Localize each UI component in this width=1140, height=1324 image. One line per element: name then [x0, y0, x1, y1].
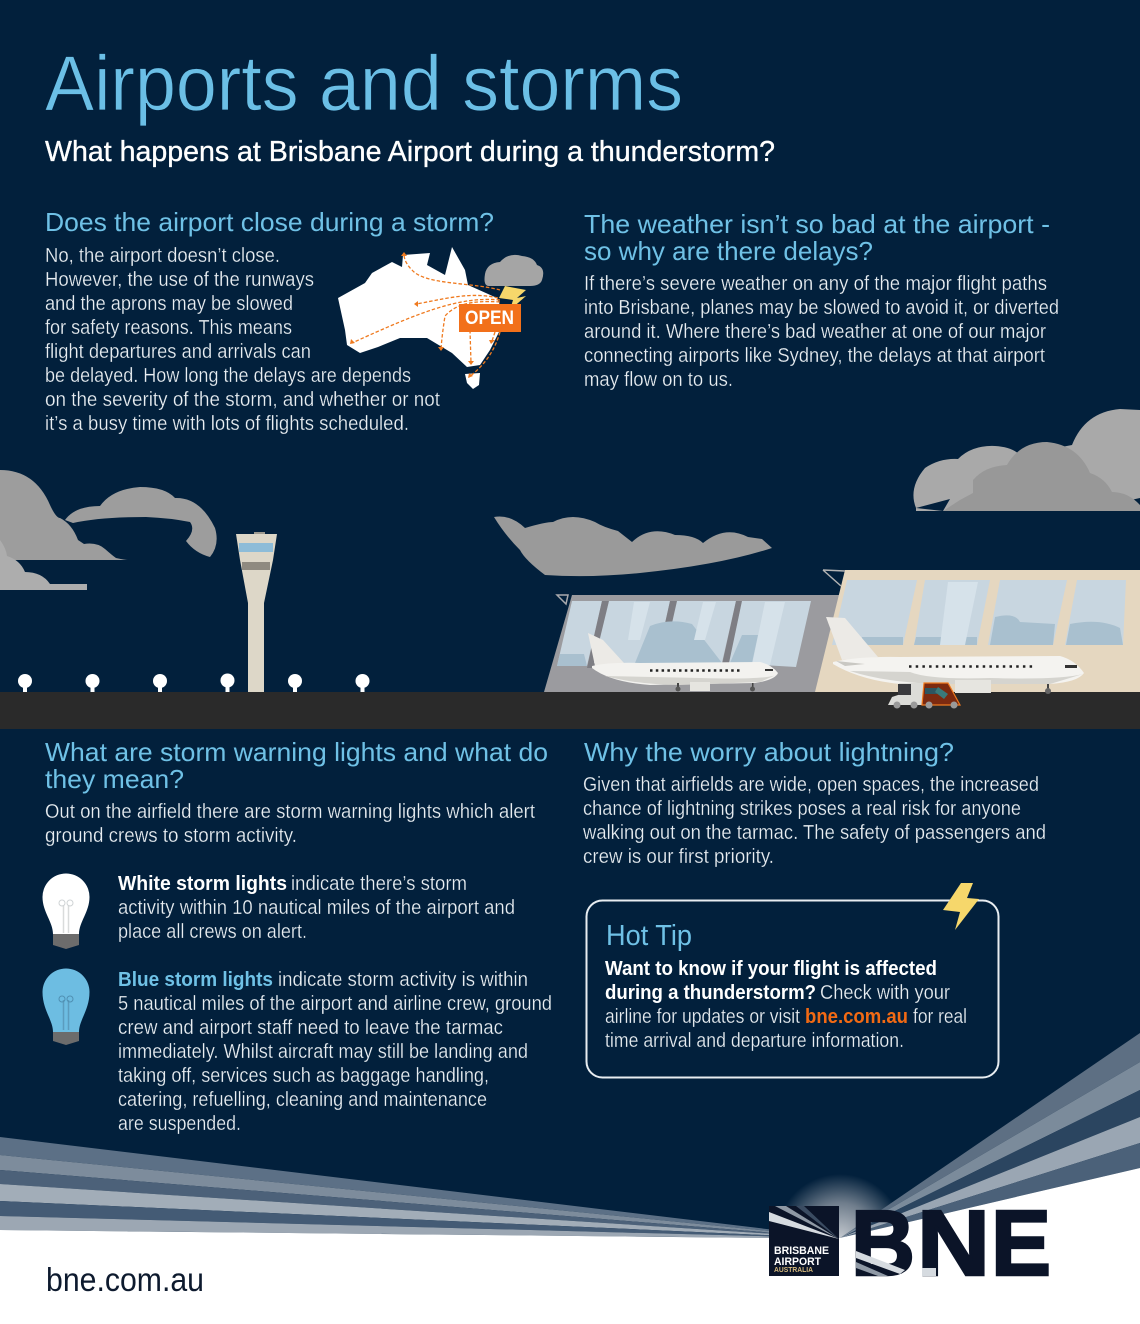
cloud: left group: [0, 470, 217, 590]
logo: Brisbane Airport: BRISBANE: [774, 1245, 829, 1257]
text block: lightning explanation: chance of lightning strikes poses a real risk for anyone: [583, 798, 1021, 820]
text block: blue storm lights: Blue storm lights: [118, 969, 273, 991]
text block: hot tip body: airline for updates or visit: [605, 1006, 800, 1028]
map of Australia with flight paths: [338, 247, 543, 389]
rays: left: [0, 1137, 775, 1238]
icon: lightning bolt on map: [499, 286, 526, 310]
window reflections: [557, 621, 758, 666]
text block: airport close answer: However, the use of the runways: [45, 269, 314, 291]
text block: hot tip body: bne.com.au: [805, 1006, 908, 1028]
text block: airport close answer: flight departures and arrivals can: [45, 341, 311, 363]
sign: open: OPEN: [465, 308, 514, 329]
logo: Brisbane Airport: [769, 1206, 839, 1276]
text block: white storm lights: White storm lights: [118, 873, 287, 895]
subtitle: What happens at Brisbane Airport during a thunderstorm?: [45, 136, 775, 168]
text block: airport close answer: for safety reasons. This means: [45, 317, 292, 339]
text block: blue storm lights: indicate storm activity is within: [278, 969, 528, 991]
panel: does the airport close: [45, 207, 543, 435]
text block: airport close answer: it’s a busy time with lots of flights scheduled.: [45, 413, 409, 435]
text block: hot tip body: [605, 958, 967, 1052]
storm warning lights on airfield: [18, 674, 370, 692]
link: bne.com.au: bne.com.au: [46, 1261, 204, 1298]
text block: blue storm lights: [118, 969, 552, 1135]
cloud: right: [913, 409, 1140, 511]
plane: far: [588, 633, 778, 692]
logo: Brisbane Airport: AUSTRALIA: [774, 1267, 813, 1274]
icon: storm cloud: [484, 255, 543, 286]
text block: lightning explanation: walking out on the tarmac. The safety of passengers and: [582, 822, 1046, 844]
text block: blue storm lights: 5 nautical miles of the airport and airline crew, ground: [118, 993, 552, 1015]
text block: delays explanation: around it. Where there’s bad weather at one of our major: [584, 321, 1046, 343]
illustration: airport scene: [0, 409, 1140, 729]
text block: white storm lights: indicate there’s storm: [291, 873, 467, 895]
text block: blue storm lights: are suspended.: [118, 1113, 241, 1135]
text block: airport close answer: on the severity of the storm, and whether or not: [45, 389, 440, 411]
text block: lightning explanation: crew is our first priority.: [583, 846, 774, 868]
white base: [0, 1168, 1140, 1324]
heading: why the worry about lightning: Why the worry about lightning?: [584, 737, 954, 767]
logo: BNE wordmark: N: [917, 1191, 990, 1295]
logo: BNE wordmark: [851, 1191, 1051, 1295]
panel: storm warning lights: [42, 737, 552, 1135]
runway: [0, 692, 1140, 729]
text block: hot tip body: Want to know if your flight is affected: [605, 958, 937, 980]
text block: hot tip body: for real: [913, 1006, 967, 1028]
panel: lightning: [582, 737, 1046, 868]
text block: blue storm lights: taking off, services such as baggage handling,: [118, 1065, 489, 1087]
plane: near: [826, 617, 1084, 694]
footer: white base and light rays: [0, 1033, 1140, 1324]
text block: delays explanation: connecting airports like Sydney, the delays at that airport: [584, 345, 1045, 367]
terminal: near: [815, 570, 1140, 692]
text block: delays explanation: may flow on to us.: [584, 369, 733, 391]
baggage vehicle: [888, 683, 960, 708]
text block: blue storm lights: crew and airport staff need to leave the tarmac: [118, 1017, 503, 1039]
heading: does the airport close: Does the airport close during a storm?: [45, 207, 494, 237]
text block: hot tip body: during a thunderstorm?: [605, 982, 816, 1004]
heading: weather and delays: The weather isn’t so bad at the airport -: [584, 209, 1050, 239]
icon: lightning bolt: [943, 883, 979, 930]
text block: white storm lights: [118, 873, 515, 943]
text block: intro: ground crews to storm activity.: [45, 825, 297, 847]
heading: hot tip: Hot Tip: [606, 920, 692, 952]
panel: why are there delays: [584, 209, 1059, 391]
logo: BNE wordmark: B: [851, 1191, 915, 1295]
logo: BNE wordmark: E: [991, 1191, 1051, 1295]
rays: right: [840, 1033, 1140, 1238]
heading: storm warning lights: What are storm warning lights and what do: [45, 737, 548, 767]
icon: white light bulb: [42, 874, 90, 949]
text block: hot tip body: Check with your: [820, 982, 950, 1004]
text block: airport close answer: No, the airport doesn’t close.: [45, 245, 280, 267]
heading: weather and delays: so why are there delays?: [584, 236, 873, 266]
text block: white storm lights: activity within 10 nautical miles of the airport and: [118, 897, 515, 919]
text block: lightning explanation: Given that airfields are wide, open spaces, the increased: [583, 774, 1039, 796]
text block: delays explanation: into Brisbane, planes may be slowed to avoid it, or diverted: [584, 297, 1059, 319]
window reflections: [860, 637, 977, 645]
text block: intro: [45, 801, 535, 847]
text block: white storm lights: place all crews on alert.: [118, 921, 307, 943]
text block: lightning explanation: [582, 774, 1046, 868]
sign: open: [459, 304, 521, 332]
text block: hot tip body: time arrival and departure information.: [605, 1030, 904, 1052]
text block: airport close answer: be delayed. How long the delays are depends: [45, 365, 411, 387]
text block: airport close answer: [45, 245, 440, 435]
text block: intro: Out on the airfield there are storm warning lights which alert: [45, 801, 535, 823]
heading: weather and delays: [584, 209, 1050, 266]
heading: storm warning lights: [45, 737, 548, 794]
glow behind logo: [776, 1174, 904, 1238]
logo: Brisbane Airport: AIRPORT: [774, 1256, 821, 1268]
heading: storm warning lights: they mean?: [45, 764, 184, 794]
text block: blue storm lights: catering, refuelling, cleaning and maintenance: [118, 1089, 487, 1111]
control tower: [236, 532, 277, 692]
icon: blue light bulb: [42, 968, 90, 1045]
callout: hot tip: [586, 883, 998, 1078]
terminal: far: [544, 595, 840, 692]
text block: delays explanation: [584, 273, 1059, 391]
text block: airport close answer: and the aprons may be slowed: [45, 293, 293, 315]
text block: delays explanation: If there’s severe weather on any of the major flight paths: [584, 273, 1047, 295]
text block: blue storm lights: immediately. Whilst aircraft may still be landing and: [118, 1041, 528, 1063]
cloud: centre: [494, 516, 772, 576]
title: Airports and storms: [45, 39, 683, 127]
